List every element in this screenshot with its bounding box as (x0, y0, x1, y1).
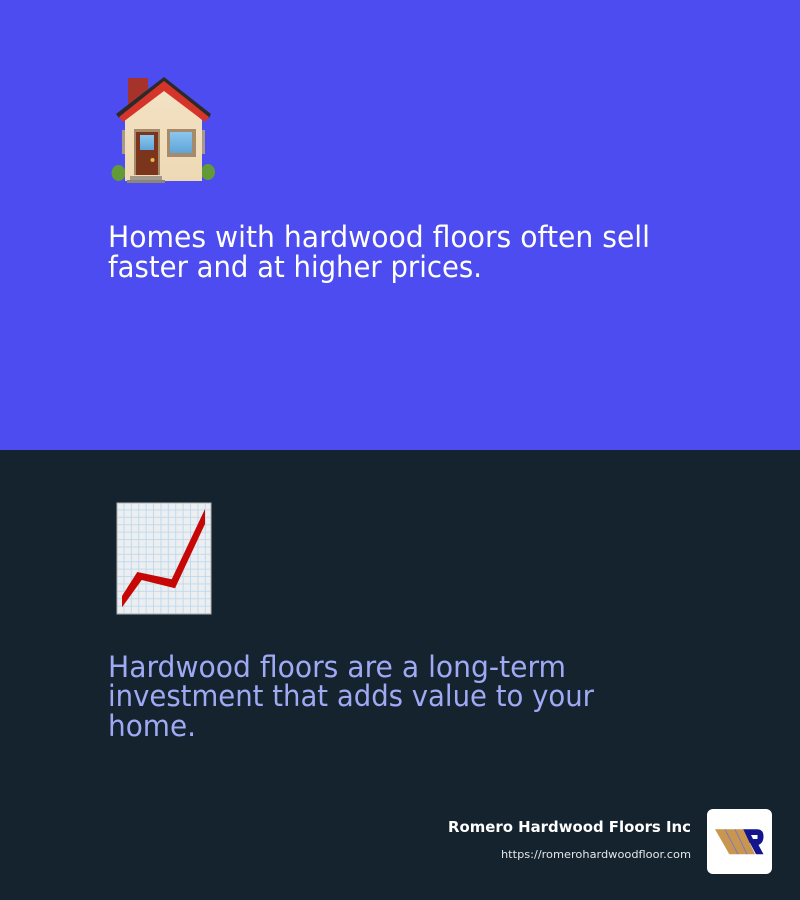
text: website url: https://romerohardwoodfloor.com (501, 849, 691, 861)
text: top statement: faster and at higher prices. (108, 250, 482, 284)
icon: rising chart (117, 503, 211, 614)
text: bottom statement: investment that adds value to your (108, 679, 595, 713)
panel: bottom section background (0, 450, 800, 900)
icon: company logo (707, 809, 772, 874)
text: bottom statement (108, 650, 595, 743)
text: company name: Romero Hardwood Floors Inc (448, 818, 691, 836)
text: bottom statement: home. (108, 709, 196, 743)
text: top statement: Homes with hardwood floors often sell (108, 220, 650, 254)
text: top statement (108, 220, 650, 284)
text: bottom statement: Hardwood floors are a long-term (108, 650, 566, 684)
panel: top section background (0, 0, 800, 450)
icon: house (112, 77, 215, 183)
